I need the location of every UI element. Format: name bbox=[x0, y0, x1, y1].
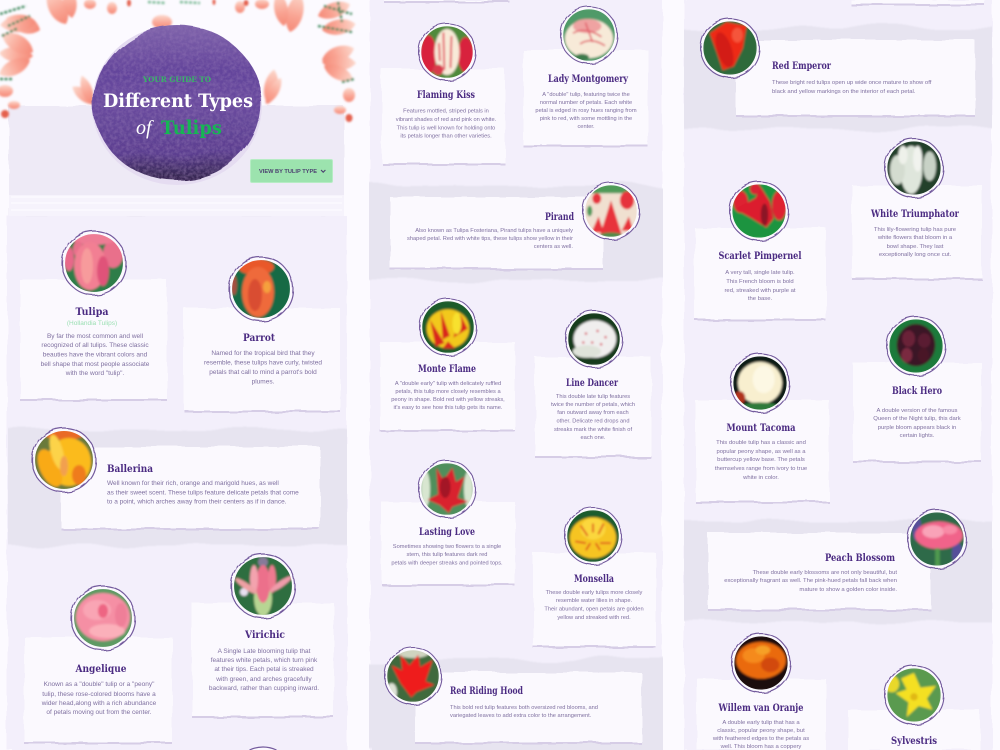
icon: pink tulip bbox=[62, 231, 126, 295]
card background bbox=[695, 228, 826, 321]
icon: scarlet pimpernel tulip bbox=[730, 182, 788, 240]
description: This lily-flowering tulip has pure bbox=[874, 227, 957, 233]
description: shaped petal. Red with white tips, these tulips show yellow in their bbox=[407, 236, 573, 242]
card background bbox=[848, 710, 980, 750]
description: A Single Late blooming tulip that bbox=[218, 648, 311, 655]
title: Flaming Kiss bbox=[417, 89, 475, 101]
description: streaks mark the white finish of bbox=[554, 427, 632, 433]
icon: peach blossom tulip bbox=[908, 510, 966, 568]
description: exceptionally fragrant as well. The pink-hued petals fall back when bbox=[724, 578, 897, 584]
title: Scarlet Pimpernel bbox=[718, 250, 802, 262]
card background bbox=[533, 553, 656, 648]
description: petals with deeper streaks and pointed tops. bbox=[391, 560, 503, 566]
card: Lady Montgomery bbox=[523, 7, 648, 147]
heading tulips: Tulips bbox=[161, 117, 222, 139]
description: wider head,along with a rich abundance bbox=[41, 700, 157, 707]
card: Angelique bbox=[24, 586, 172, 744]
card: Lasting Love bbox=[382, 461, 515, 586]
card background bbox=[184, 308, 340, 412]
icon: monte flame tulip bbox=[420, 299, 476, 355]
card: Sylvestris bbox=[848, 666, 980, 750]
card: Monte Flame bbox=[380, 299, 515, 432]
card: Tulipa bbox=[20, 231, 167, 401]
card background bbox=[382, 502, 515, 586]
card: previous card edge bbox=[384, 0, 510, 3]
title: Willem van Oranje bbox=[718, 702, 804, 714]
description: other. Delicate red drops and bbox=[556, 418, 630, 424]
description: By far the most common and well bbox=[47, 333, 144, 340]
description: These double early blossoms are not only beautiful, but bbox=[753, 570, 897, 576]
title: White Triumphator bbox=[870, 208, 959, 220]
title bbox=[103, 75, 253, 139]
description: pink to red, with some mottling in the bbox=[540, 116, 632, 122]
card: White Triumphator bbox=[852, 139, 982, 280]
icon: next ring peek bbox=[250, 747, 276, 750]
watercolor blob bbox=[93, 25, 261, 181]
title: Monsella bbox=[574, 573, 614, 585]
description: This bold red tulip features both oversized red blooms, and bbox=[450, 705, 598, 711]
button: view by tulip type: VIEW BY TULIP TYPE bbox=[259, 169, 317, 175]
icon: peony tulip bbox=[71, 586, 135, 650]
description: exceptionally long once cut. bbox=[879, 252, 952, 258]
card: Flaming Kiss bbox=[382, 24, 505, 165]
column one cards bbox=[20, 231, 340, 750]
title: Lasting Love bbox=[419, 526, 475, 538]
icon: white tulip bbox=[885, 139, 943, 197]
description: popular peony shape, as well as a bbox=[716, 449, 806, 455]
description: tulip, these rose-colored blooms have a bbox=[42, 691, 156, 698]
panel: column two background bbox=[369, 0, 664, 750]
icon: sylvestris tulip bbox=[885, 666, 943, 724]
description: This tulip is well known for holding onto bbox=[397, 126, 495, 132]
subtitle: (Hollandia Tulips) bbox=[67, 320, 117, 327]
card background bbox=[697, 679, 826, 750]
description: twice the number of petals, which bbox=[551, 402, 635, 408]
icon: red riding hood tulip bbox=[385, 644, 441, 704]
title: Sylvestris bbox=[891, 735, 937, 747]
card background bbox=[535, 357, 651, 458]
icon: flaming kiss tulip bbox=[419, 24, 475, 80]
card background bbox=[523, 50, 648, 147]
card background bbox=[852, 185, 982, 280]
description: petals that call to mind a parrot's bold bbox=[209, 369, 317, 376]
card: Pirand bbox=[390, 183, 639, 270]
description: Sometimes showing two flowers to a single bbox=[393, 544, 501, 550]
description: Known as a "double" tulip or a "peony" bbox=[44, 681, 155, 688]
title: Red Riding Hood bbox=[450, 685, 523, 697]
description: Also known as Tulipa Fosteriana, Pirand tulips have a uniquely bbox=[415, 228, 573, 234]
description: its petals longer than other varieties. bbox=[400, 134, 492, 140]
description: themselves range from ivory to true bbox=[715, 466, 808, 472]
description: with green, and arches gracefully bbox=[215, 676, 312, 683]
card background bbox=[390, 197, 603, 270]
card background bbox=[61, 447, 320, 530]
description: center. bbox=[577, 124, 595, 130]
card: Peach Blossom bbox=[708, 510, 966, 611]
description: as their sweet scent. These tulips feature delicate petals that come bbox=[107, 490, 299, 496]
card: Mount Tacoma bbox=[695, 354, 829, 503]
title: Lady Montgomery bbox=[548, 73, 629, 85]
description: vibrant shades of red and pink on white. bbox=[396, 117, 497, 123]
card background bbox=[24, 637, 172, 744]
description: resemble, these tulips have curly, twisted bbox=[204, 360, 322, 366]
description: bowl shape. They last bbox=[887, 244, 944, 250]
title: Virichic bbox=[244, 629, 285, 641]
description: A "double" tulip, featuring twice the bbox=[542, 92, 630, 98]
description: classic, popular peony shape, but bbox=[717, 728, 805, 734]
title: Peach Blossom bbox=[825, 552, 895, 564]
description: Named for the tropical bird that they bbox=[211, 350, 315, 357]
description: of petals moving out from the center. bbox=[46, 709, 152, 716]
title: Pirand bbox=[545, 211, 574, 223]
description: This double late tulip features bbox=[556, 394, 630, 400]
description: features white petals, which turn pink bbox=[211, 657, 318, 664]
description: red, streaked with purple at bbox=[724, 288, 796, 294]
panel: column three background bbox=[665, 0, 1000, 750]
card: Parrot bbox=[184, 257, 340, 412]
description: petals, this tulip more closely resembles a bbox=[395, 389, 501, 395]
panel: column one background bbox=[0, 106, 365, 750]
description: Features mottled, striped petals in bbox=[403, 108, 489, 114]
card background bbox=[853, 363, 982, 463]
description: beauties have the vibrant colors and bbox=[43, 352, 148, 358]
description: This double tulip has a classic and bbox=[716, 440, 806, 446]
description: well. This bloom has a coppery bbox=[720, 744, 801, 750]
title: Mount Tacoma bbox=[726, 422, 796, 434]
description: A very tall, single late tulip. bbox=[725, 270, 795, 276]
button: view by tulip type bbox=[250, 160, 332, 182]
icon: willem van oranje tulip bbox=[732, 634, 790, 692]
description: recognized of all tulips. These classic bbox=[41, 342, 149, 349]
description: with feathered edges to the petals as bbox=[712, 736, 809, 742]
description: A double version of the famous bbox=[877, 408, 957, 414]
description: yellow and streaked with red. bbox=[557, 615, 631, 621]
heading line one: Different Types bbox=[103, 90, 253, 112]
card: Line Dancer bbox=[535, 311, 651, 458]
card: Red Emperor bbox=[701, 19, 975, 117]
description: petal is edged in rosy hues ranging from bbox=[535, 108, 637, 114]
description: stem, this tulip features dark red bbox=[407, 552, 487, 558]
card: Black Hero bbox=[853, 317, 982, 463]
description: with the word "tulip". bbox=[65, 370, 124, 377]
description: peony in shape. Bold red with yellow streaks, bbox=[391, 397, 505, 403]
icon: parrot tulip bbox=[229, 257, 293, 321]
description: centers as well. bbox=[534, 244, 573, 250]
description: Well known for their rich, orange and marigold hues, as well bbox=[107, 480, 279, 487]
card background bbox=[380, 342, 515, 432]
description: bell shape that most people associate bbox=[41, 361, 150, 368]
description: at their tips. Each petal is streaked bbox=[214, 666, 314, 673]
description: Their abundant, open petals are golden bbox=[544, 606, 644, 612]
title: Red Emperor bbox=[772, 60, 831, 72]
card: Monsella bbox=[533, 508, 656, 648]
card background bbox=[695, 400, 829, 503]
description: Queen of the Night tulip, this dark bbox=[873, 416, 961, 422]
card: Virichic bbox=[192, 554, 334, 718]
header floral border bbox=[0, 0, 357, 122]
icon: virichic tulip bbox=[231, 554, 295, 618]
description: to a point, which arches away from their centers as if in dance. bbox=[107, 498, 287, 506]
icon: lasting love tulip bbox=[419, 461, 475, 517]
column two cards bbox=[380, 0, 656, 744]
title: Ballerina bbox=[107, 463, 153, 475]
card: Scarlet Pimpernel bbox=[695, 182, 826, 321]
card background bbox=[736, 40, 975, 117]
description: fan outward away from each bbox=[557, 410, 629, 416]
card background bbox=[20, 280, 167, 401]
description: These double early tulips more closely bbox=[546, 590, 643, 596]
description: variegated leaves to add extra color to the arrangement. bbox=[450, 713, 592, 719]
icon: yellow tulip bbox=[32, 428, 96, 492]
heading of: of bbox=[136, 117, 154, 139]
card background bbox=[192, 603, 334, 718]
title: Angelique bbox=[75, 663, 127, 675]
card: Red Riding Hood bbox=[385, 644, 641, 744]
eyebrow: YOUR GUIDE TO bbox=[142, 75, 211, 84]
description: backward, rather than cupping inward. bbox=[209, 685, 319, 692]
card background bbox=[708, 533, 931, 611]
title: Line Dancer bbox=[566, 377, 618, 389]
description: plumes. bbox=[252, 378, 275, 386]
icon: pirand tulip bbox=[583, 183, 639, 239]
description: This French bloom is bold bbox=[726, 279, 794, 285]
icon: line dancer tulip bbox=[566, 311, 622, 367]
icon: mount tacoma tulip bbox=[731, 354, 789, 412]
description: buttercup yellow base. The petals bbox=[717, 457, 805, 463]
description: resemble water lilies in shape. bbox=[556, 598, 633, 604]
description: mature to show a golden color inside. bbox=[799, 587, 897, 593]
header divider lines bbox=[11, 197, 342, 210]
description: A "double early" tulip with delicately ruffled bbox=[395, 381, 501, 387]
title: Black Hero bbox=[892, 385, 942, 397]
card: Ballerina bbox=[32, 428, 320, 530]
title: Tulipa bbox=[76, 306, 109, 318]
description: white flowers that bloom in a bbox=[877, 235, 953, 241]
description: the base. bbox=[748, 296, 772, 302]
card: previous card edge bbox=[851, 0, 985, 6]
card background bbox=[415, 672, 641, 744]
description: it's easy to see how this tulip gets its name. bbox=[394, 405, 503, 411]
description: These bright red tulips open up wide once mature to show off bbox=[772, 80, 932, 86]
description: A double early tulip that has a bbox=[722, 720, 800, 726]
card: Willem van Oranje bbox=[697, 634, 826, 750]
title: Parrot bbox=[243, 332, 275, 344]
column three cards bbox=[695, 0, 985, 750]
description: certain lights. bbox=[900, 433, 935, 439]
icon: black hero tulip bbox=[887, 317, 945, 375]
card background bbox=[382, 69, 505, 165]
description: white in color. bbox=[742, 475, 779, 481]
icon: monsella tulip bbox=[565, 508, 621, 564]
description: black and yellow markings on the interior of each petal. bbox=[772, 89, 916, 95]
description: normal number of petals. Each white bbox=[540, 100, 632, 106]
watercolor halo bbox=[92, 25, 262, 185]
title: Monte Flame bbox=[418, 363, 476, 375]
icon: red emperor tulip bbox=[701, 19, 759, 77]
description: purple bloom appears black in bbox=[878, 425, 956, 431]
icon: lady montgomery tulip bbox=[561, 7, 617, 63]
description: each one. bbox=[581, 435, 606, 441]
